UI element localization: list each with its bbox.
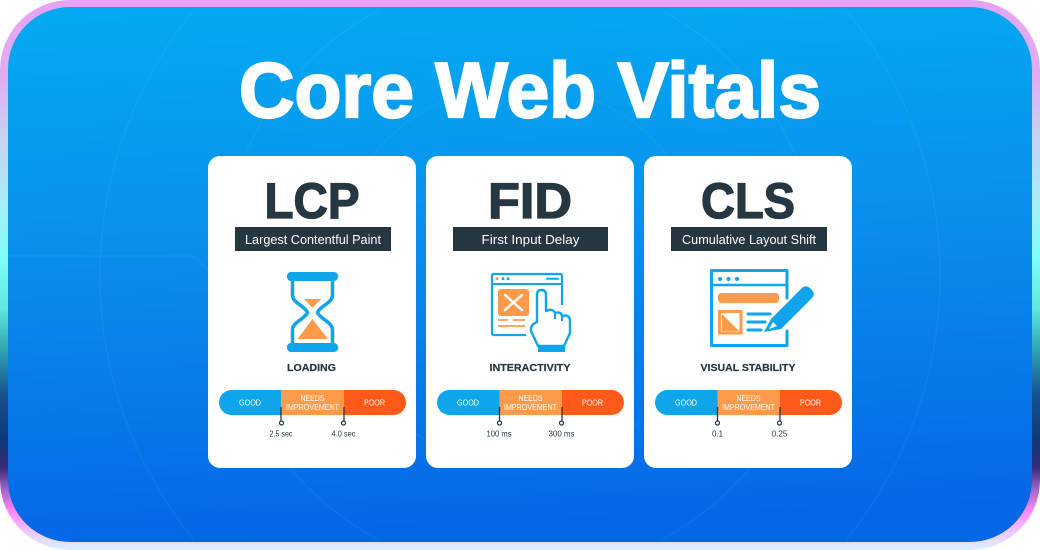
scale bar: 2.5 sec [270, 430, 292, 438]
subtitle: Largest Contentful Paint [235, 227, 391, 251]
panel: LCP [208, 156, 416, 468]
scale bar: IMPROVEMENT [722, 403, 775, 412]
subtitle: First Input Delay: First Input Delay [482, 233, 580, 247]
scale bar: NEEDS [518, 394, 542, 403]
scale bar: POOR [364, 398, 385, 408]
scale bar [655, 390, 842, 438]
scale bar: 300 ms [548, 430, 574, 438]
title: Core Web Vitals [239, 46, 821, 134]
scale bar: NEEDS [300, 394, 324, 403]
scale bar: POOR [800, 398, 821, 408]
scale bar: GOOD [675, 398, 697, 408]
scale bar: IMPROVEMENT [286, 403, 339, 412]
scale bar [219, 390, 406, 438]
icon: hourglass [287, 272, 338, 352]
subtitle: First Input Delay [453, 227, 608, 251]
subtitle: Cumulative Layout Shift: Cumulative Layout Shift [682, 233, 817, 247]
scale bar: NEEDS [736, 394, 760, 403]
heading: CLS: CLS [701, 173, 795, 229]
label: INTERACTIVITY: INTERACTIVITY [490, 362, 570, 374]
scale bar: POOR [582, 398, 603, 408]
panel: CLS [644, 156, 852, 468]
scale bar: GOOD [239, 398, 261, 408]
scale bar: 4.0 sec [332, 430, 356, 438]
scale bar [437, 390, 624, 438]
scale bar: 0.1 [712, 430, 724, 438]
scale bar: 100 ms [486, 430, 512, 438]
scale bar: GOOD [457, 398, 479, 408]
subtitle: Largest Contentful Paint: Largest Contentful Paint [245, 233, 382, 247]
panel: FID [426, 156, 634, 468]
scale bar: IMPROVEMENT [504, 403, 557, 412]
icon: document layout with pen [711, 270, 814, 346]
icon: browser window with pointing hand [492, 274, 570, 352]
heading: FID: FID [488, 173, 572, 229]
heading: LCP: LCP [264, 173, 360, 229]
scale bar: 0.25 [772, 430, 788, 438]
label: LOADING: LOADING [287, 362, 336, 374]
subtitle: Cumulative Layout Shift [671, 227, 827, 251]
label: VISUAL STABILITY: VISUAL STABILITY [700, 362, 796, 374]
